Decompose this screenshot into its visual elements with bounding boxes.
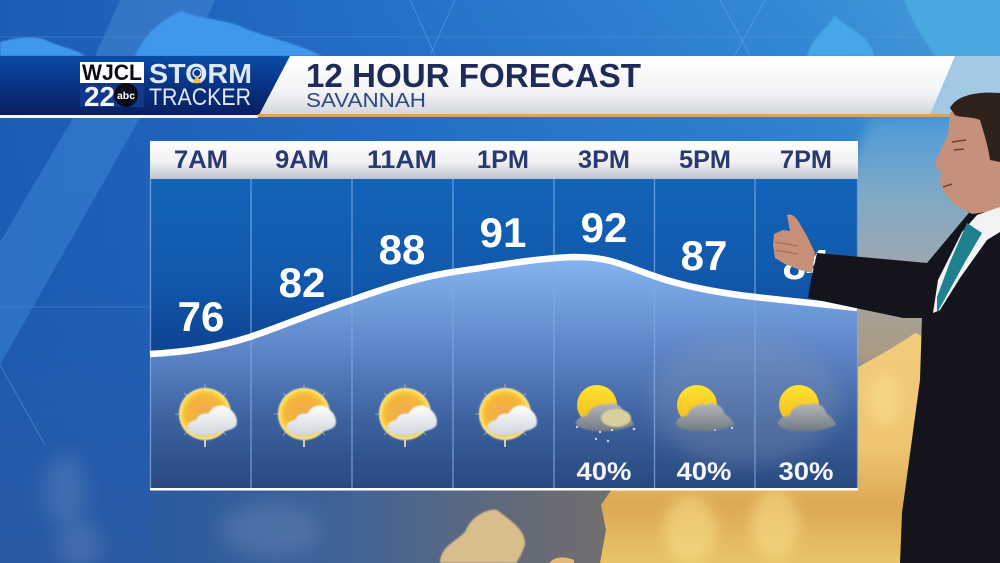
temperature curve (150, 257, 857, 354)
lighter diagonal band (0, 118, 140, 365)
banner white section (258, 56, 955, 115)
temperatures (178, 204, 830, 340)
temperatures: 88 (379, 226, 425, 273)
logo: WJCL 22 abc Storm Tracker: STORM (149, 58, 252, 89)
location: SAVANNAH (306, 90, 426, 112)
temperatures: 82 (279, 259, 325, 306)
yellow cloud lower right (440, 333, 922, 563)
temperatures: 87 (681, 232, 727, 279)
icon: partly sunny 7AM (175, 384, 237, 447)
temperatures: 91 (480, 209, 526, 256)
presenter (773, 93, 1000, 563)
time labels: 11AM (367, 146, 437, 174)
icon: partly sunny 11AM (375, 384, 437, 447)
suit (808, 205, 1000, 563)
header strip (150, 141, 858, 179)
time labels: 3PM (578, 146, 630, 174)
tie (937, 223, 982, 313)
logo: WJCL 22 abc Storm Tracker: abc (117, 90, 135, 102)
title: 12 HOUR FORECAST (306, 58, 642, 95)
cloud seen through panel (650, 335, 840, 465)
hand (773, 214, 815, 273)
temperatures: 92 (581, 204, 627, 251)
rain chances: 30% (778, 458, 834, 486)
logo: WJCL 22 abc Storm Tracker: TRACKER (149, 84, 251, 111)
pale banner extension (930, 56, 1000, 115)
shirt collar (933, 207, 1000, 313)
icon: partly sunny 1PM (475, 384, 537, 447)
temperatures: 76 (178, 293, 224, 340)
column dividers (150, 179, 858, 489)
blue cumulus clouds at top (0, 0, 1000, 56)
icon: cloud and sun 7PM (778, 385, 836, 431)
title banner (0, 56, 1000, 118)
time labels: 5PM (679, 146, 731, 174)
icon: cloud and sun 5PM (676, 385, 734, 431)
face (935, 112, 1000, 214)
time labels: 7AM (174, 146, 228, 174)
forecast panel (150, 141, 858, 490)
upper panel body (150, 179, 858, 354)
lower panel body (150, 257, 857, 489)
time labels: 9AM (275, 146, 329, 174)
time labels: 7PM (780, 146, 832, 174)
small clouds (440, 510, 525, 563)
lower band background (150, 489, 910, 563)
logo: WJCL 22 abc Storm Tracker: WJCL (82, 60, 142, 85)
panel bottom edge (150, 488, 858, 490)
time labels: 1PM (477, 146, 529, 174)
rain chances: 40% (576, 458, 632, 486)
icon: partly sunny 9AM (274, 384, 336, 447)
temperatures: 84 (783, 241, 830, 288)
banner lines (0, 115, 258, 118)
banner blue section (0, 56, 290, 115)
right background haze (845, 118, 1000, 368)
rain chances (576, 458, 834, 486)
hair (950, 93, 1000, 162)
icon: rain cloud 3PM (576, 385, 635, 442)
time labels (174, 146, 832, 174)
rain chances: 40% (676, 458, 732, 486)
facial features (943, 140, 966, 187)
logo: WJCL 22 abc Storm Tracker (80, 58, 252, 112)
logo: WJCL 22 abc Storm Tracker: 22 (84, 81, 115, 112)
